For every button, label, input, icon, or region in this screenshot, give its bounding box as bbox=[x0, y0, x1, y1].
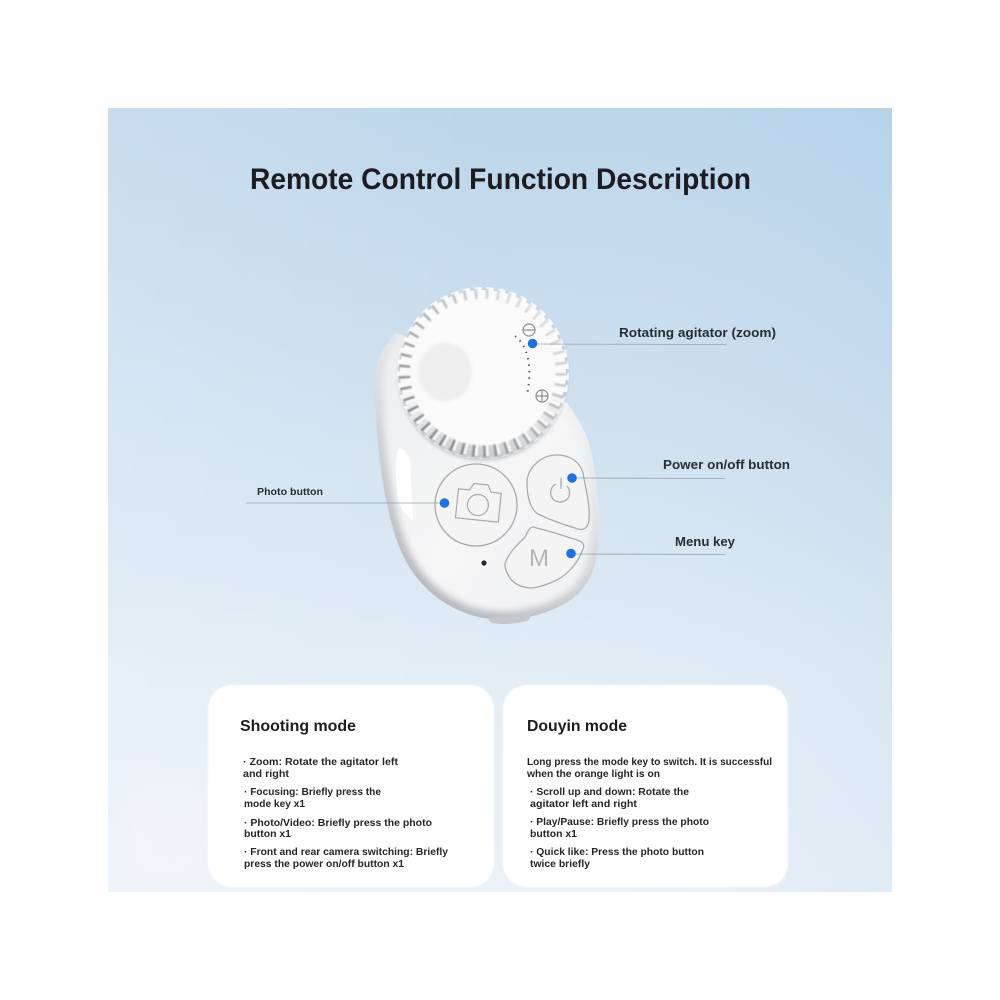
callout: photo button bbox=[246, 486, 449, 508]
panel: douyin mode bbox=[503, 685, 788, 887]
callout: photo button: Photo button bbox=[257, 486, 323, 498]
list: when the orange light is on bbox=[526, 768, 660, 780]
dial teeth bbox=[404, 294, 562, 452]
heading: Douyin mode bbox=[527, 718, 627, 735]
remote control device bbox=[375, 289, 599, 624]
list: agitator left and right bbox=[530, 798, 638, 810]
list: press the power on/off button x1 bbox=[244, 858, 404, 870]
callout: power button: Power on/off button bbox=[663, 458, 790, 472]
callout: rotating agitator: Rotating agitator (zoom) bbox=[619, 326, 776, 340]
background panel bbox=[108, 108, 892, 892]
power button bbox=[527, 455, 589, 530]
list: · Zoom: Rotate the agitator left bbox=[243, 756, 398, 768]
plus symbol bbox=[536, 390, 548, 402]
dial recess bbox=[418, 343, 472, 401]
rotating dial bbox=[398, 289, 568, 461]
list bbox=[526, 756, 772, 870]
body edge shading bbox=[375, 333, 599, 620]
icon: power bbox=[551, 478, 570, 502]
list: · Quick like: Press the photo button bbox=[530, 846, 704, 858]
minus symbol bbox=[523, 324, 535, 336]
photo button bbox=[435, 464, 517, 546]
callout: power button bbox=[567, 458, 790, 483]
title: Remote Control Function Description bbox=[250, 163, 751, 196]
list: · Focusing: Briefly press the bbox=[244, 786, 381, 798]
list bbox=[243, 756, 448, 870]
list: button x1 bbox=[244, 828, 291, 840]
list: · Scroll up and down: Rotate the bbox=[530, 786, 689, 798]
menu button bbox=[505, 527, 584, 588]
list: · Play/Pause: Briefly press the photo bbox=[530, 816, 709, 828]
list: · Photo/Video: Briefly press the photo bbox=[244, 817, 432, 829]
callout: menu key: Menu key bbox=[675, 535, 735, 549]
callout: menu key bbox=[566, 535, 735, 558]
icon: camera bbox=[455, 482, 502, 522]
list: twice briefly bbox=[530, 858, 590, 870]
list: · Front and rear camera switching: Briefly bbox=[244, 846, 448, 858]
list: button x1 bbox=[530, 828, 577, 840]
bottom clip bbox=[488, 614, 531, 624]
callout: rotating agitator bbox=[528, 326, 776, 348]
panel: shooting mode bbox=[208, 685, 494, 887]
list: Long press the mode key to switch. It is successful bbox=[527, 756, 772, 768]
list: mode key x1 bbox=[244, 798, 305, 810]
dial face bbox=[410, 298, 554, 442]
list: and right bbox=[243, 768, 290, 780]
side slot bbox=[396, 449, 413, 520]
heading: Shooting mode bbox=[240, 718, 356, 735]
zoom scale dots bbox=[515, 336, 529, 395]
device body bbox=[375, 333, 599, 620]
menu label: M bbox=[529, 545, 549, 572]
microphone hole bbox=[481, 560, 487, 566]
